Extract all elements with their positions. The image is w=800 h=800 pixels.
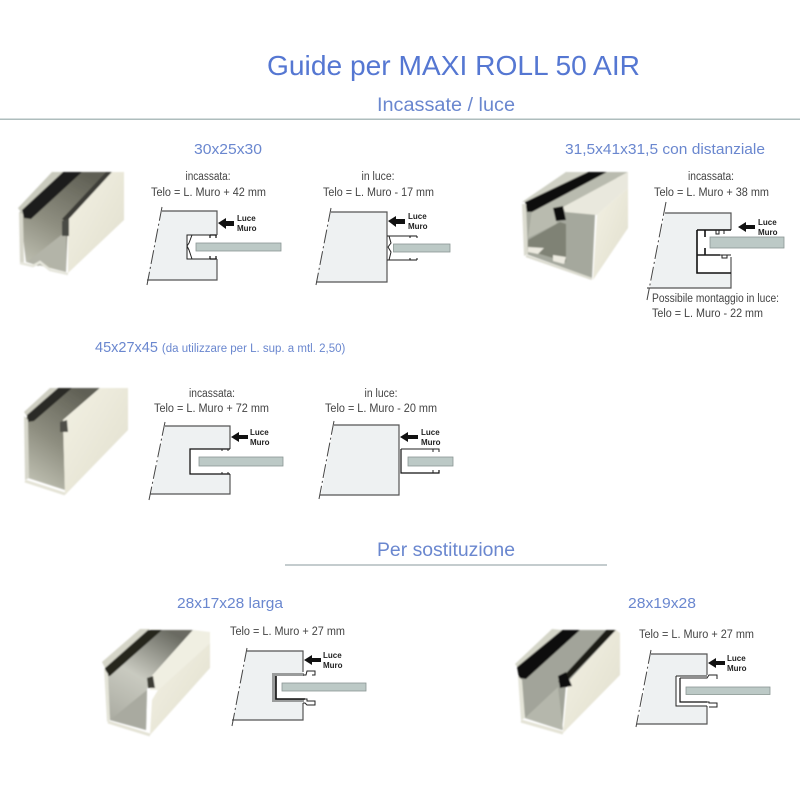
diagram: incassata 38 mm bbox=[647, 202, 784, 320]
note formula: Telo = L. Muro - 22 mm bbox=[652, 308, 763, 320]
diagram: in luce 20 mm: Luce bbox=[421, 428, 440, 437]
label: 28x19x28: 28x19x28 bbox=[628, 596, 696, 612]
panel: 31,5x41x31,5 bbox=[522, 142, 784, 320]
caption: in luce: bbox=[364, 388, 398, 400]
panel: 30x25x30 bbox=[18, 142, 450, 285]
photo: profile 28x19x28 bbox=[515, 629, 620, 733]
diagram: incassata 38 mm: Luce bbox=[758, 218, 777, 227]
formula: Telo = L. Muro + 42 mm bbox=[151, 187, 266, 199]
diagram: 27 mm: Muro bbox=[727, 664, 747, 673]
photo: profile 28x17x28 larga bbox=[102, 629, 210, 735]
diagram: in luce 20 mm bbox=[319, 421, 453, 499]
diagram: in luce 20 mm: Muro bbox=[421, 438, 441, 447]
diagram: incassata 72 mm: Luce bbox=[250, 428, 269, 437]
diagram: incassata 72 mm: Muro bbox=[250, 438, 270, 447]
note: Possibile montaggio in luce: bbox=[652, 293, 779, 305]
caption: incassata: bbox=[189, 388, 235, 400]
photo: profile 31,5x41x31,5 bbox=[522, 172, 628, 280]
diagram: incassata 42 mm bbox=[147, 207, 281, 285]
diagram: incassata 38 mm: Muro bbox=[758, 228, 778, 237]
label: 28x17x28 larga: 28x17x28 larga bbox=[177, 596, 284, 612]
diagram: 27 mm larga: Luce bbox=[323, 651, 342, 660]
panel: 45x27x45 bbox=[24, 340, 453, 500]
photo: profile 30x25x30 bbox=[18, 172, 124, 274]
title: Guide per MAXI ROLL 50 AIR bbox=[267, 50, 640, 81]
diagram: in luce 17 mm bbox=[316, 208, 450, 285]
photo: profile 45x27x45 bbox=[24, 388, 128, 495]
diagram: in luce 17 mm: Muro bbox=[408, 222, 428, 231]
diagram: incassata 72 mm bbox=[149, 422, 283, 500]
diagram: 27 mm bbox=[636, 650, 770, 727]
formula: Telo = L. Muro + 72 mm bbox=[154, 403, 269, 415]
diagram: 27 mm: Luce bbox=[727, 654, 746, 663]
panel: 28x19x28 bbox=[515, 596, 770, 733]
diagram: 27 mm larga bbox=[232, 648, 366, 726]
caption: incassata: bbox=[186, 171, 230, 183]
panel: 28x17x28 larga bbox=[102, 596, 366, 735]
diagram: in luce 17 mm: Luce bbox=[408, 212, 427, 221]
formula: Telo = L. Muro + 27 mm bbox=[639, 629, 754, 641]
section heading: Per sostituzione: Per sostituzione bbox=[377, 540, 515, 561]
caption: in luce: bbox=[362, 171, 394, 183]
diagram: 27 mm larga: Muro bbox=[323, 661, 343, 670]
formula: Telo = L. Muro - 20 mm bbox=[325, 403, 437, 415]
formula: Telo = L. Muro - 17 mm bbox=[323, 187, 434, 199]
diagram: incassata 42 mm: Luce bbox=[237, 214, 256, 223]
label: 45x27x45: 45x27x45 (da utilizzare per L. sup. a mtl. 2,50) bbox=[95, 340, 346, 356]
diagram: incassata 42 mm: Muro bbox=[237, 224, 257, 233]
formula: Telo = L. Muro + 27 mm bbox=[230, 626, 345, 638]
label: 31,5x41x31,5 con distanziale: 31,5x41x31,5 con distanziale bbox=[565, 142, 765, 158]
caption: incassata: bbox=[688, 171, 734, 183]
formula: Telo = L. Muro + 38 mm bbox=[654, 187, 769, 199]
label: 30x25x30: 30x25x30 bbox=[194, 142, 262, 158]
section heading: Incassate / luce: Incassate / luce bbox=[377, 95, 515, 116]
